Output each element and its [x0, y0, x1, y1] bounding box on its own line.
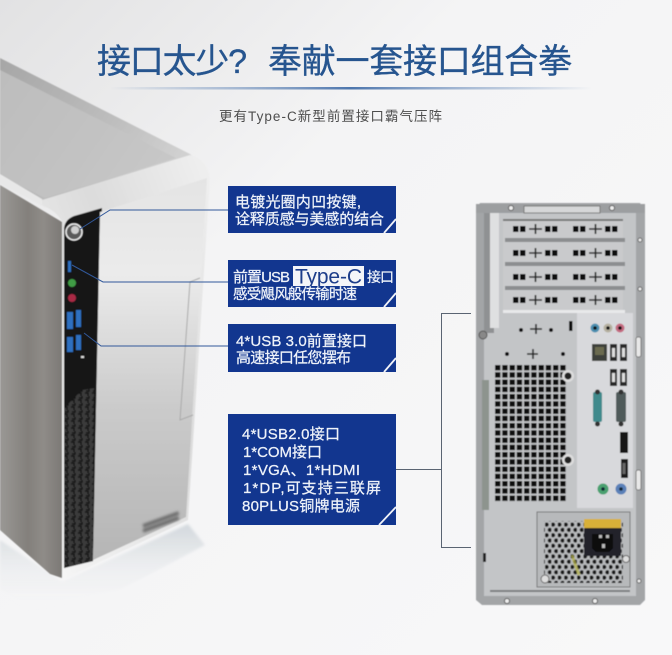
- front frame: [42, 155, 210, 578]
- callout: rear ports: [228, 414, 396, 525]
- front tower computer: [0, 58, 210, 610]
- leader line: USB 3.0: [84, 333, 228, 346]
- COM and VGA ports: [593, 390, 626, 426]
- audio jacks: [590, 324, 624, 332]
- subtitle: 更有Type-C新型前置接口霸气压阵: [219, 108, 442, 124]
- tower top surface: [0, 58, 205, 205]
- rear frame top bar: [476, 204, 645, 291]
- callout: rear ports: 1*DP,可支持三联屏: [243, 480, 381, 497]
- callout: rear ports: 80PLUS铜牌电源: [242, 498, 360, 515]
- callout: rear ports: 1*VGA、1*HDMI: [243, 462, 360, 479]
- rear chassis: [476, 203, 645, 605]
- leader line: Type-C: [72, 265, 228, 282]
- front ports: [67, 261, 84, 358]
- tower logo: [142, 511, 179, 533]
- callout: USB 3.0: 高速接口任您摆布: [236, 350, 351, 366]
- LAN and USB 2.0 ports: [592, 344, 627, 386]
- tower side panel: [0, 185, 62, 578]
- power button: [66, 224, 82, 240]
- DP and HDMI ports: [620, 432, 628, 478]
- PS/2 ports: [598, 484, 626, 494]
- title underline: [110, 87, 592, 90]
- callout: Type-C: 感受飓风般传输时速: [233, 286, 357, 303]
- leader line: button: [80, 210, 228, 229]
- callout: USB 3.0: 4*USB 3.0前置接口: [236, 333, 367, 350]
- vent grid: [495, 365, 567, 502]
- callout: Type-C: 接口: [367, 269, 394, 285]
- callout: Type-C: [228, 260, 396, 307]
- expansion slots: [503, 219, 625, 313]
- callout: Type-C: Type-C: [295, 266, 362, 288]
- vent screw: [562, 370, 574, 466]
- callout: button: 电镀光圈内凹按键,: [235, 194, 361, 211]
- panel seam: [180, 278, 200, 420]
- I/O plate: [577, 313, 633, 508]
- dark front column: [64, 208, 102, 568]
- callout: button: 诠释质感与美感的结合: [235, 211, 384, 228]
- rear frame bottom: [483, 337, 641, 604]
- glossy front panel: [93, 178, 207, 560]
- callout: button: [228, 186, 396, 233]
- callout: rear ports: 4*USB2.0接口: [242, 426, 340, 443]
- callout: Type-C: 前置USB: [233, 269, 290, 286]
- left rail: [479, 213, 499, 510]
- side vent mesh: [64, 388, 94, 568]
- callout: USB 3.0: [228, 324, 396, 372]
- title: [97, 43, 572, 81]
- title: 接口太少?: [97, 43, 247, 81]
- top edge strip: [0, 174, 46, 208]
- floor shadow: [0, 524, 205, 610]
- power supply: [537, 512, 630, 587]
- bracket connector: [396, 314, 471, 548]
- title: 奉献一套接口组合拳: [268, 43, 572, 81]
- rear tower computer: [476, 203, 645, 605]
- mounting knockouts: [505, 321, 572, 359]
- rear inner plate: [484, 212, 636, 596]
- top surface highlight: [0, 70, 176, 198]
- callout: rear ports: 1*COM接口: [243, 444, 322, 461]
